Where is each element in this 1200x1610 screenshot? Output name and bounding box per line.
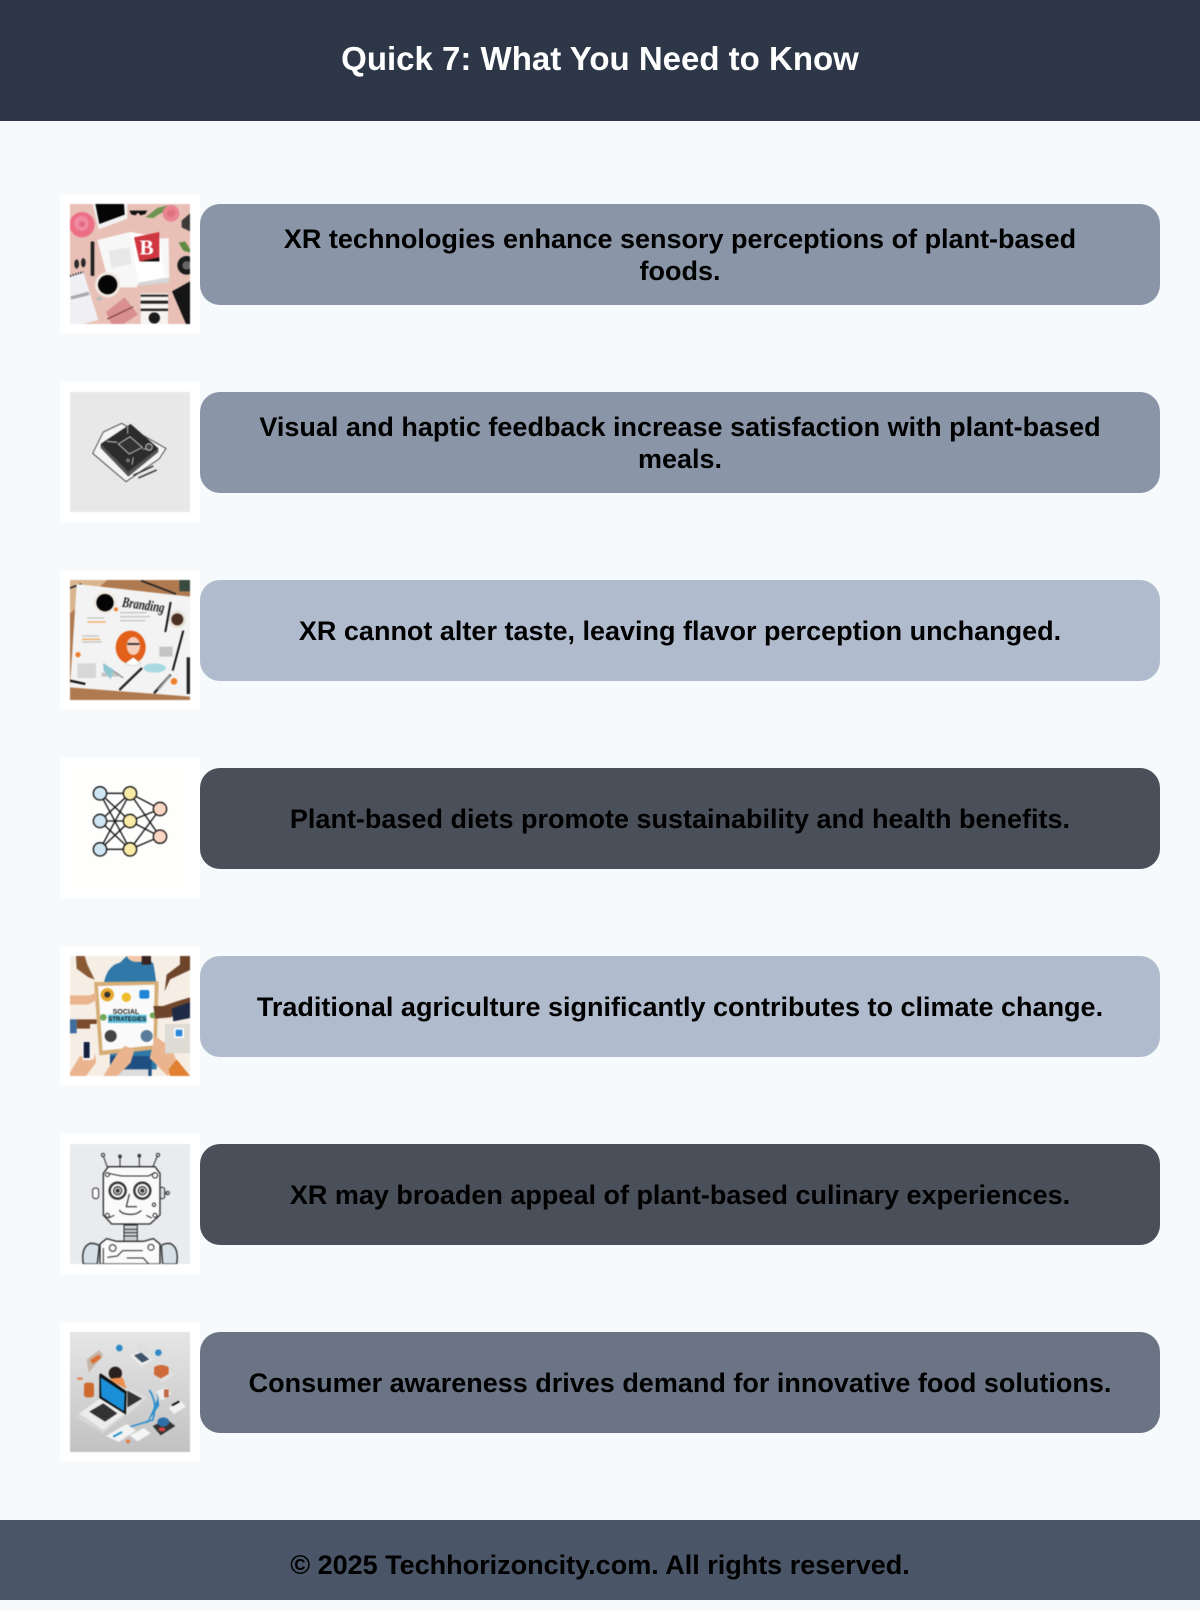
row 7 (70, 1332, 1160, 1452)
text: finding 5 (200, 956, 1160, 1057)
row 3 (69, 579, 1160, 701)
text: finding 4: Plant-based diets promote sustainability and health benefits. (290, 804, 1070, 834)
text: finding 7 (200, 1332, 1160, 1433)
text: finding 3 (200, 580, 1160, 681)
text: finding 2 (200, 392, 1160, 493)
header: title (0, 0, 1200, 121)
text: finding 6 (200, 1144, 1160, 1245)
image: social strategies board (60, 946, 200, 1086)
text: finding 4 (200, 768, 1160, 869)
text: finding 2: Visual and haptic feedback increase satisfaction with plant-based meals. (259, 412, 1101, 474)
text: finding 3: XR cannot alter taste, leaving flavor perception unchanged. (299, 616, 1061, 646)
footer: copyright (0, 1520, 1200, 1600)
image: neural network (60, 758, 200, 898)
row 2 (70, 392, 1160, 512)
image: microchip (60, 382, 200, 522)
row 4 (92, 768, 1160, 869)
image: flat-lay with brochure: B (140, 236, 154, 260)
text: finding 1: XR technologies enhance sensory perceptions of plant-based foods. (284, 224, 1076, 286)
text: finding 7: Consumer awareness drives demand for innovative food solutions. (249, 1368, 1111, 1398)
text: finding 1 (200, 204, 1160, 305)
image: isometric laptop workspace (60, 1322, 200, 1462)
footer: copyright: © 2025 Techhorizoncity.com. All rights reserved. (290, 1550, 910, 1580)
row 5 (70, 955, 1160, 1077)
row 6 (70, 1144, 1160, 1265)
image: social strategies board: STRATEGIES (108, 1017, 146, 1023)
image: social strategies board: SOCIAL (113, 1009, 140, 1016)
text: finding 6: XR may broaden appeal of plant-based culinary experiences. (290, 1180, 1070, 1210)
image: branding sheet: Branding (120, 595, 166, 617)
text: finding 5: Traditional agriculture significantly contributes to climate change. (257, 992, 1103, 1022)
header: title: Quick 7: What You Need to Know (341, 40, 859, 77)
image: branding sheet (60, 570, 200, 710)
image: flat-lay with brochure (60, 194, 200, 334)
image: robot line art (60, 1134, 200, 1274)
row 1 (69, 203, 1160, 325)
